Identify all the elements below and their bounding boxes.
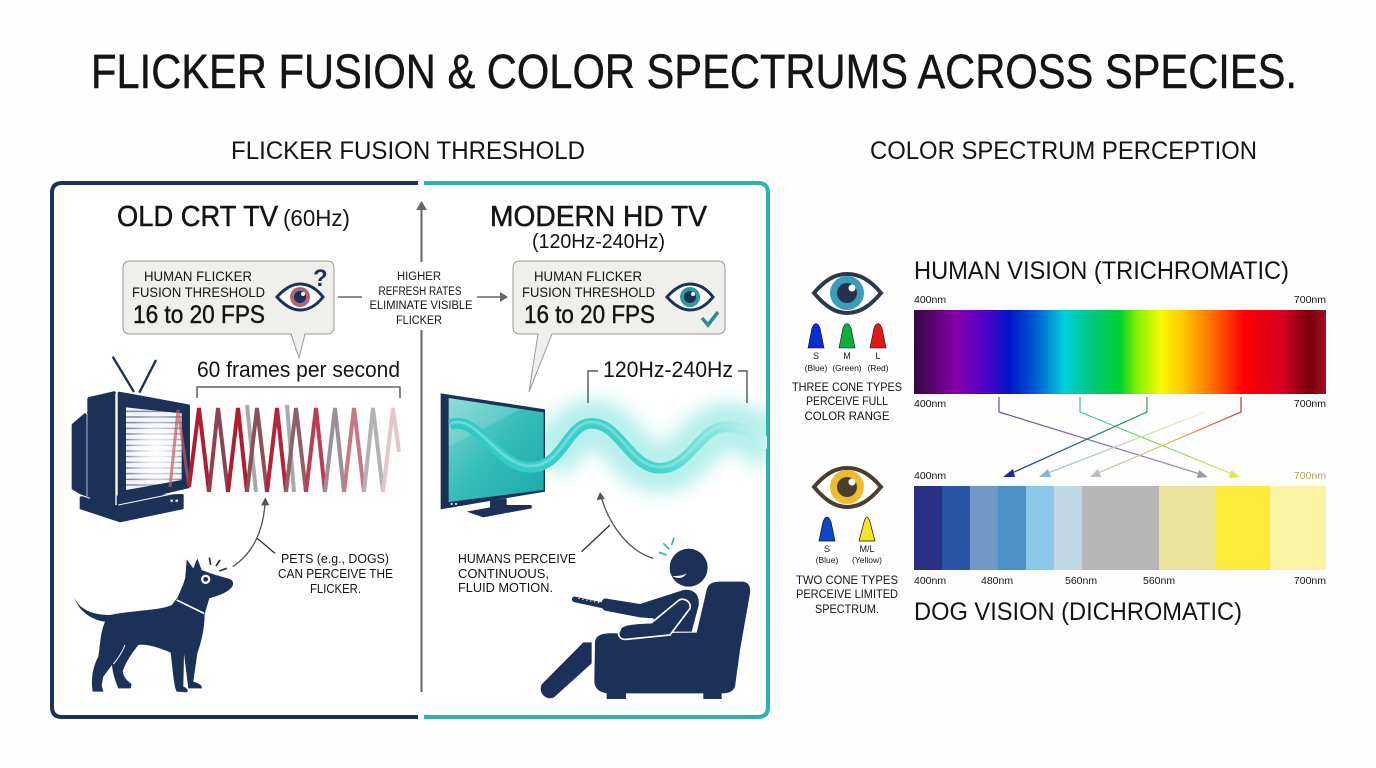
- callout: threshold, modern TV: FUSION THRESHOLD: [522, 284, 655, 300]
- text: cone labels, dog: [816, 544, 882, 565]
- text: pets can perceive the flicker: [278, 552, 393, 596]
- label: top wavelengths, dog: 700nm: [1294, 470, 1326, 482]
- subheading: 60Hz: (60Hz): [283, 205, 350, 231]
- icon: two cones: [819, 517, 875, 541]
- arrow: right connector: [477, 292, 508, 302]
- text: humans perceive continuous fluid motion: FLUID MOTION.: [458, 581, 553, 595]
- text: three cone types: PERCEIVE FULL: [806, 394, 888, 408]
- icon: eye with question mark: ?: [313, 265, 328, 292]
- text: two cone types: SPECTRUM.: [815, 602, 879, 616]
- label: top wavelengths: [914, 294, 1326, 306]
- callout: threshold, modern TV: 16 to 20 FPS: [524, 301, 655, 329]
- panel: modern HD TV: [424, 183, 773, 717]
- label: top wavelengths: 700nm: [1294, 294, 1326, 306]
- icon: human eye: [814, 274, 881, 313]
- chart: full color spectrum bar: [914, 310, 1326, 394]
- text: higher refresh rates: REFRESH RATES: [378, 286, 462, 298]
- callout: threshold, old TV: [123, 261, 334, 358]
- chart: smooth glowing wave: [545, 423, 773, 468]
- callout: threshold, modern TV: HUMAN FLICKER: [534, 268, 642, 284]
- bracket: 120Hz-240Hz: [588, 371, 747, 403]
- arrow: dog to flicker: [233, 497, 275, 567]
- callout: threshold, old TV: 16 to 20 FPS: [133, 301, 265, 329]
- text: cone labels, human: [805, 351, 889, 373]
- text: higher refresh rates: [370, 271, 473, 327]
- icon: modern flat TV: [441, 393, 545, 517]
- chart: limited color spectrum bar: [914, 486, 1326, 570]
- callout: threshold, old TV: FUSION THRESHOLD: [132, 284, 265, 300]
- text: higher refresh rates: HIGHER: [397, 271, 441, 283]
- subheading: 120Hz-240Hz: (120Hz-240Hz): [532, 231, 665, 253]
- label: bottom wavelengths: 400nm: [914, 398, 946, 410]
- arrow: left connector: [338, 296, 362, 298]
- arrows: spectrum mapping: [999, 397, 1241, 478]
- text: three cone types: THREE CONE TYPES: [792, 380, 902, 394]
- text: two cone types: [796, 573, 898, 616]
- label: 60 frames per second: 60 frames per second: [197, 357, 400, 382]
- label: bottom wavelengths, dog: 700nm: [1294, 575, 1326, 587]
- icon: CRT television: [73, 357, 188, 521]
- text: two cone types: TWO CONE TYPES: [796, 573, 898, 587]
- text: cone labels, human: M: [843, 351, 851, 361]
- heading: modern HD TV: MODERN HD TV: [490, 201, 708, 233]
- icon: dog eye: [814, 468, 881, 507]
- text: pets can perceive the flicker: PETS (e.g., DOGS): [281, 552, 389, 566]
- label: bottom wavelengths: 700nm: [1294, 398, 1326, 410]
- bracket: 60 frames: [197, 387, 400, 398]
- label: bottom wavelengths, dog: 400nm: [914, 575, 946, 587]
- label: bottom wavelengths: [914, 398, 1326, 410]
- label: bottom wavelengths, dog: 560nm: [1143, 575, 1175, 587]
- arrow: human to wave: [582, 492, 653, 558]
- text: pets can perceive the flicker: FLICKER.: [310, 582, 361, 596]
- text: cone labels, dog: M/L: [859, 544, 875, 554]
- text: two cone types: PERCEIVE LIMITED: [796, 587, 898, 601]
- chart: wave line: [450, 422, 773, 468]
- text: higher refresh rates: FLICKER: [396, 315, 442, 327]
- callout: threshold, modern TV: [513, 261, 725, 392]
- panel: human vision: [792, 257, 1326, 423]
- text: humans perceive continuous fluid motion: [458, 552, 576, 595]
- heading: dog vision: DOG VISION (DICHROMATIC): [914, 598, 1242, 626]
- callout: threshold, old TV: HUMAN FLICKER: [144, 268, 252, 284]
- text: cone labels, human: (Green): [832, 363, 862, 373]
- heading: color spectrum perception: COLOR SPECTRUM PERCEPTION: [870, 137, 1257, 165]
- heading: flicker fusion threshold: FLICKER FUSION THRESHOLD: [231, 137, 585, 165]
- label: top wavelengths, dog: 400nm: [914, 470, 946, 482]
- text: cone labels, human: (Red): [867, 363, 889, 373]
- text: cone labels, human: (Blue): [805, 363, 827, 373]
- icon: person in armchair: [541, 538, 750, 699]
- text: humans perceive continuous fluid motion: HUMANS PERCEIVE: [458, 552, 576, 566]
- heading: human vision: HUMAN VISION (TRICHROMATIC): [914, 257, 1289, 285]
- label: bottom wavelengths, dog: 480nm: [981, 575, 1013, 587]
- text: cone labels, dog: (Yellow): [852, 555, 882, 565]
- text: cone labels, human: S: [813, 351, 819, 361]
- text: pets can perceive the flicker: CAN PERCEIVE THE: [278, 567, 393, 581]
- icon: dog silhouette: [74, 558, 233, 692]
- label: bottom wavelengths, dog: [914, 575, 1326, 587]
- text: cone labels, dog: S: [824, 544, 830, 554]
- text: cone labels, human: L: [875, 351, 881, 361]
- panel: dog vision: [796, 468, 1326, 626]
- icon: three cones: [808, 324, 886, 348]
- label: 120Hz-240Hz: 120Hz-240Hz: [603, 357, 733, 382]
- text: three cone types: [792, 380, 902, 423]
- text: humans perceive continuous fluid motion: CONTINUOUS,: [458, 567, 549, 581]
- label: top wavelengths, dog: [914, 470, 1326, 482]
- icon: eye with question mark: [277, 265, 328, 310]
- text: three cone types: COLOR RANGE: [804, 409, 890, 423]
- text: cone labels, dog: (Blue): [816, 555, 838, 565]
- panel: old CRT TV: [52, 183, 418, 717]
- label: bottom wavelengths, dog: 560nm: [1065, 575, 1097, 587]
- arrow: center divider: [416, 201, 427, 692]
- heading: old CRT TV: OLD CRT TV: [117, 201, 279, 233]
- text: higher refresh rates: ELIMINATE VISIBLE: [370, 300, 473, 312]
- icon: eye with check mark: [667, 284, 718, 325]
- label: top wavelengths: 400nm: [914, 294, 946, 306]
- chart: flicker wave: [170, 405, 399, 492]
